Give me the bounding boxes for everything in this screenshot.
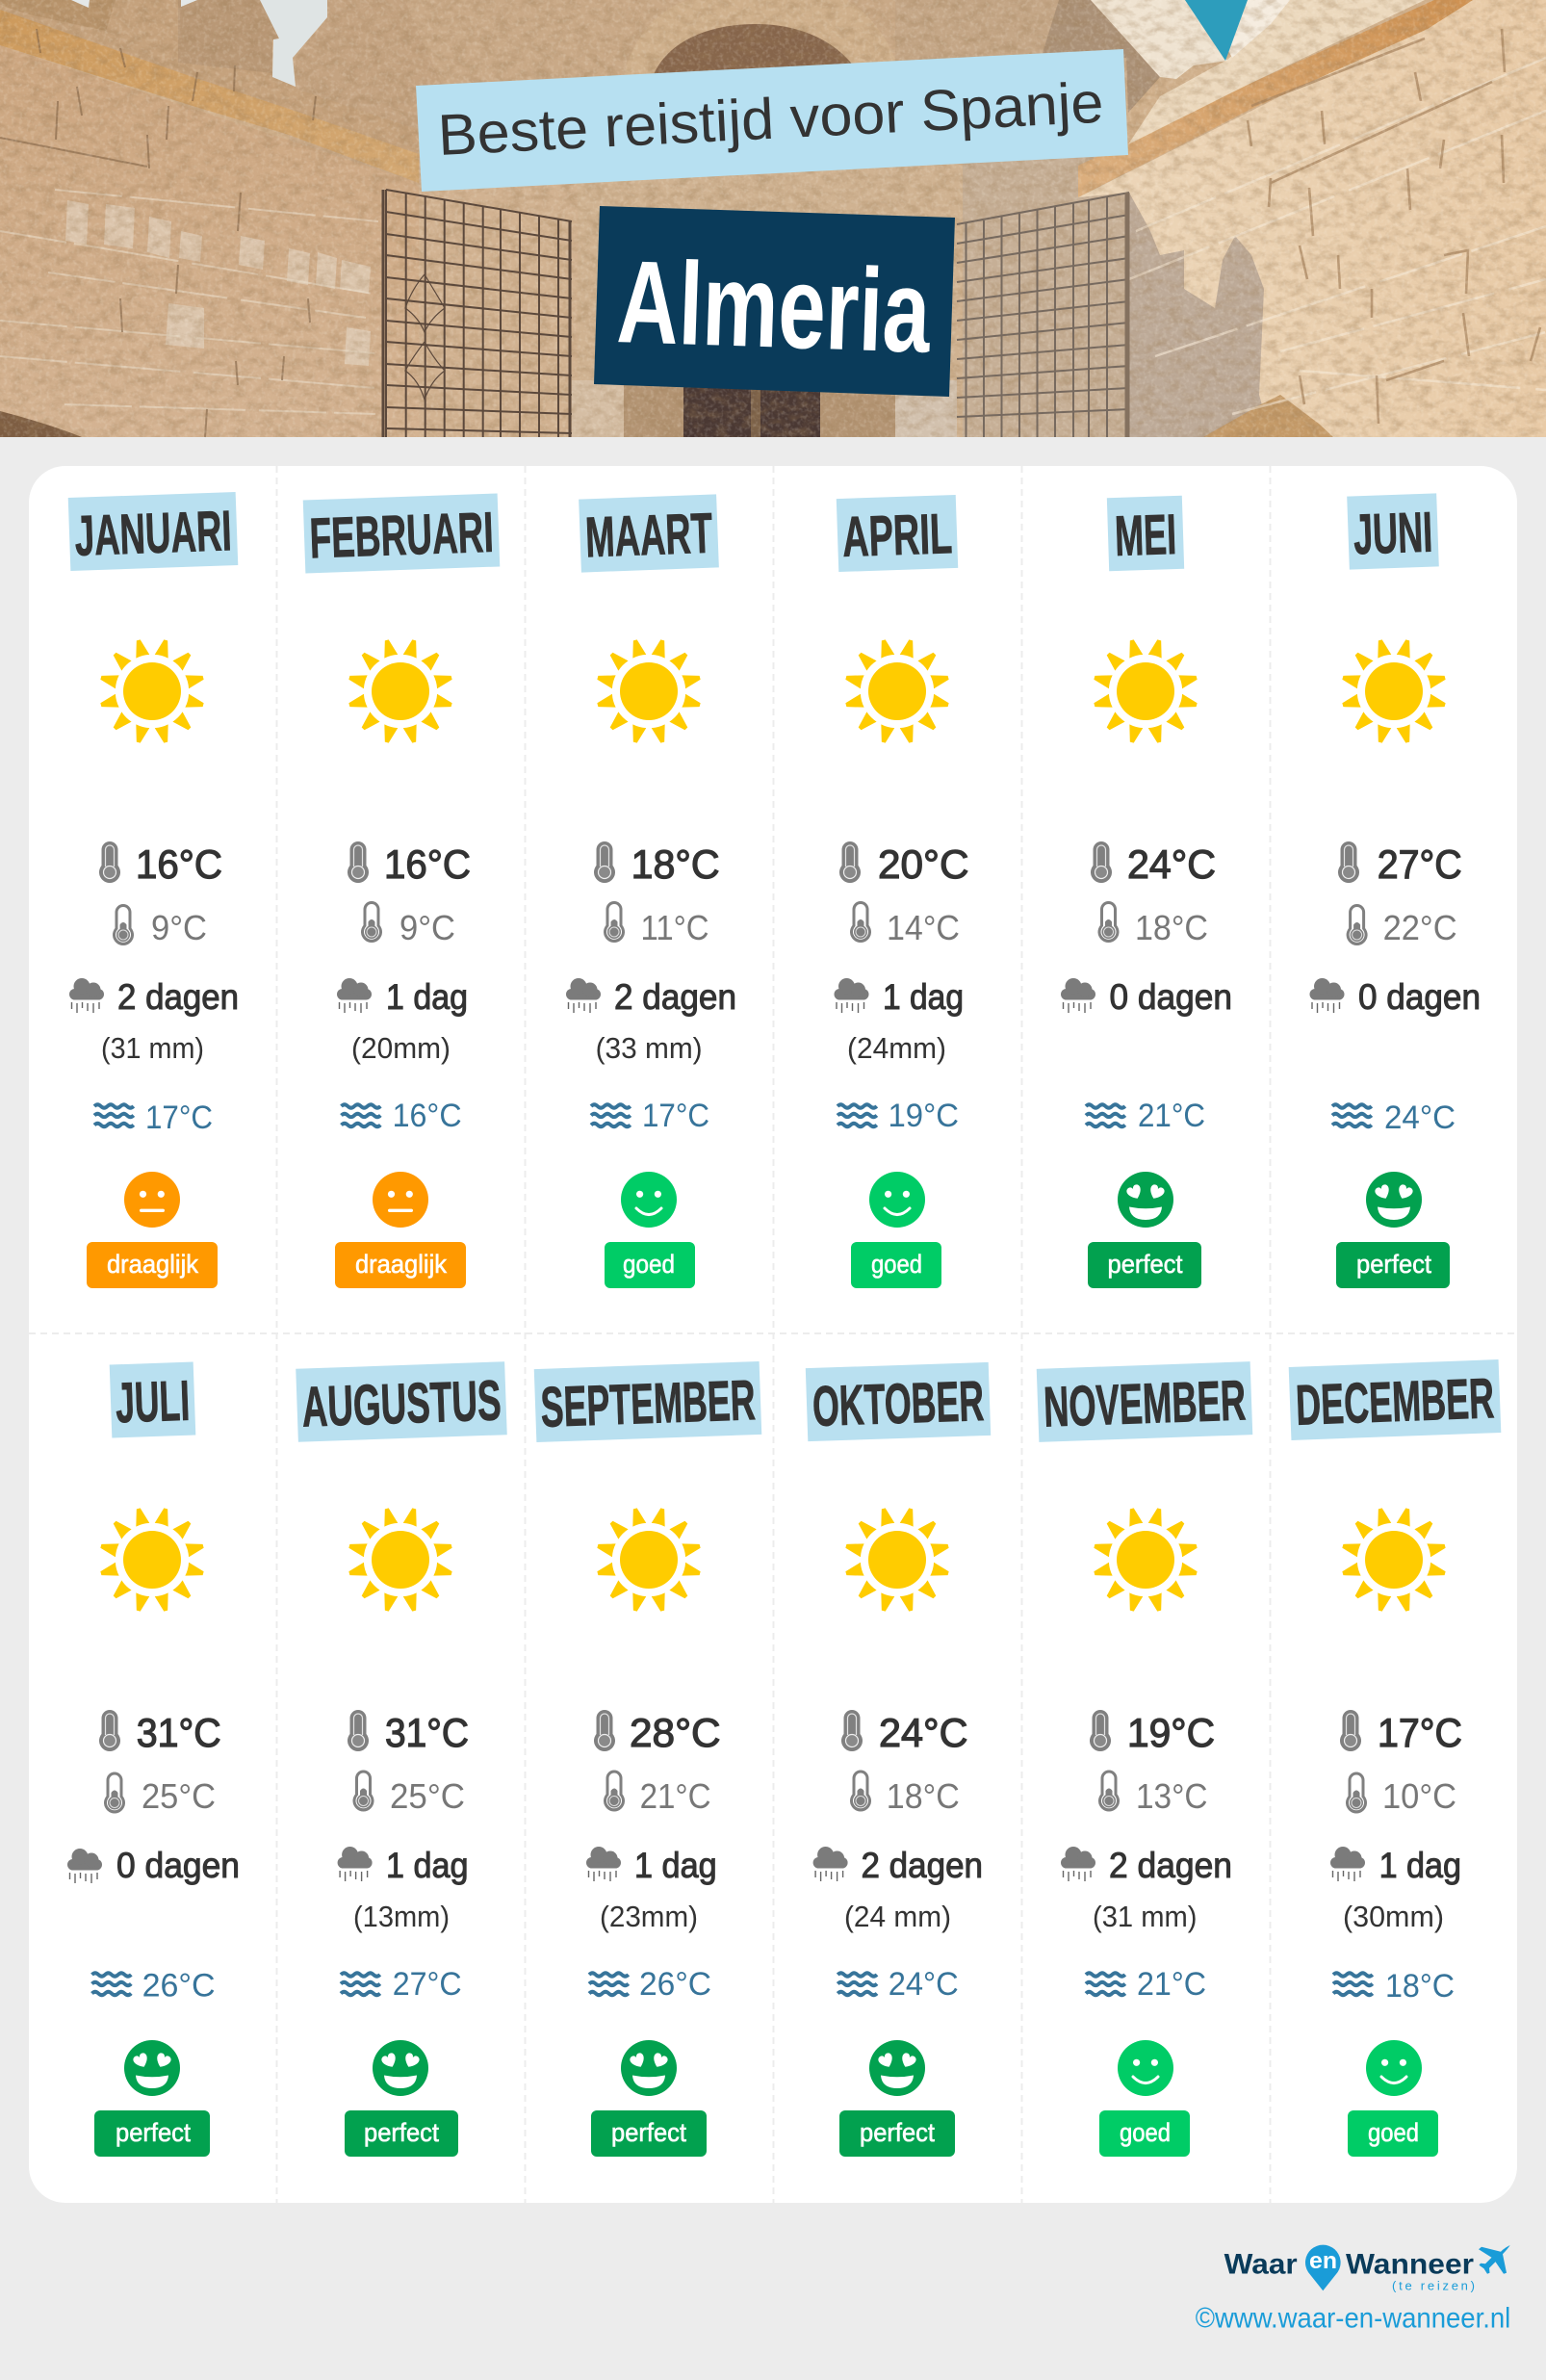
heading: september <box>534 1361 761 1442</box>
min temperature: 9°C <box>151 908 207 947</box>
icon: waves <box>341 1973 380 1995</box>
rating badge: draaglijk <box>355 1250 447 1279</box>
rating badge <box>605 1242 695 1288</box>
icon: heart eyes face <box>869 2040 925 2096</box>
heading: september: SEPTEMBER <box>539 1368 757 1439</box>
logo: Waar en Wanneer: Wanneer <box>1346 2249 1474 2281</box>
rating badge <box>87 1242 218 1288</box>
rating badge: goed <box>1120 2118 1171 2147</box>
icon: rain cloud <box>338 1847 373 1881</box>
icon: waves <box>94 1104 134 1126</box>
rainfall: (24 mm) <box>844 1900 951 1933</box>
rating badge: perfect <box>1107 1250 1183 1279</box>
rating badge: perfect <box>611 2118 686 2147</box>
rain days: 1 dag <box>1379 1846 1461 1885</box>
min temperature: 10°C <box>1382 1776 1456 1816</box>
min temperature: 11°C <box>641 908 709 947</box>
heading: januari: JANUARI <box>73 499 233 568</box>
website url: ©www.waar-en-wanneer.nl <box>1196 2303 1510 2335</box>
rating badge: perfect <box>364 2118 439 2147</box>
min temperature: 13°C <box>1136 1776 1207 1816</box>
sea temperature: 19°C <box>888 1098 959 1134</box>
icon: thermometer low <box>1346 1772 1367 1813</box>
icon: thermometer low <box>361 901 382 943</box>
max temperature: 18°C <box>631 841 720 887</box>
max temperature: 16°C <box>136 841 222 887</box>
icon: sun <box>844 638 950 744</box>
rating badge <box>851 1242 941 1288</box>
heading: mei <box>1107 496 1184 571</box>
icon: thermometer low <box>1098 1770 1120 1811</box>
month: september <box>534 1361 761 2157</box>
rainfall: (31 mm) <box>1093 1900 1198 1933</box>
rating badge <box>94 2110 210 2157</box>
max temperature: 31°C <box>137 1710 221 1755</box>
panel: month card <box>29 466 1517 2203</box>
min temperature: 22°C <box>1383 908 1457 947</box>
month: november <box>1037 1361 1252 2157</box>
icon: heart eyes face <box>124 2040 180 2096</box>
rain days: 1 dag <box>883 977 964 1017</box>
max temperature: 28°C <box>630 1710 721 1755</box>
icon: smiling face <box>1118 2040 1173 2096</box>
rain days: 0 dagen <box>1109 977 1232 1017</box>
icon: thermometer low <box>850 901 871 943</box>
icon: waves <box>1086 1104 1125 1126</box>
min temperature: 25°C <box>142 1776 216 1816</box>
rainfall: (24mm) <box>847 1031 946 1065</box>
icon: sun <box>1093 1507 1198 1613</box>
icon: neutral face <box>373 1172 428 1228</box>
max temperature: 17°C <box>1378 1710 1462 1755</box>
icon: rain cloud <box>1309 978 1344 1013</box>
icon: thermometer high <box>594 841 615 883</box>
max temperature: 24°C <box>879 1710 968 1755</box>
min temperature: 21°C <box>640 1776 711 1816</box>
icon: waves <box>92 1973 131 1995</box>
rainfall: (33 mm) <box>596 1031 703 1065</box>
heading: augustus <box>296 1361 507 1442</box>
heading: april <box>837 495 958 572</box>
month: maart <box>566 494 736 1288</box>
month: januari <box>68 492 239 1288</box>
rain days: 2 dagen <box>1109 1846 1232 1885</box>
icon: sun <box>596 638 702 744</box>
heading: oktober <box>806 1362 991 1441</box>
min temperature: 9°C <box>399 908 455 947</box>
rating badge: perfect <box>1356 1250 1431 1279</box>
rain days: 2 dagen <box>117 977 239 1017</box>
heading: november <box>1037 1361 1252 1442</box>
icon: rain cloud <box>1061 1847 1095 1881</box>
rain days: 1 dag <box>386 977 468 1017</box>
rating badge <box>1336 1242 1450 1288</box>
heading: januari <box>68 492 238 571</box>
heading: maart: MAART <box>584 502 713 569</box>
icon: smiling face <box>1366 2040 1422 2096</box>
max temperature: 20°C <box>878 841 968 887</box>
rainfall: (31 mm) <box>101 1031 204 1065</box>
icon: thermometer high <box>594 1710 615 1751</box>
rain days: 2 dagen <box>861 1846 983 1885</box>
rainfall: (30mm) <box>1343 1900 1444 1933</box>
rating badge <box>335 1242 466 1288</box>
month: februari <box>303 493 500 1288</box>
sea temperature: 17°C <box>642 1098 709 1134</box>
month: augustus <box>296 1361 507 2157</box>
rating badge <box>839 2110 955 2157</box>
rainfall: (23mm) <box>600 1900 698 1933</box>
sea temperature: 17°C <box>145 1099 213 1136</box>
icon: thermometer high <box>99 1710 120 1751</box>
rainfall: (13mm) <box>353 1900 450 1933</box>
min temperature: 25°C <box>390 1776 465 1816</box>
month: april <box>834 495 968 1288</box>
icon: waves <box>837 1104 877 1126</box>
sea temperature: 24°C <box>889 1966 959 2003</box>
icon: waves <box>341 1104 380 1126</box>
icon: sun <box>99 638 205 744</box>
month: mei <box>1061 496 1232 1288</box>
min temperature: 18°C <box>887 1776 960 1816</box>
icon: heart eyes face <box>1366 1172 1422 1228</box>
logo: Waar en Wanneer: (te reizen) <box>1392 2279 1475 2293</box>
icon: thermometer low <box>113 904 134 945</box>
min temperature: 18°C <box>1135 908 1208 947</box>
icon: rain cloud <box>566 978 601 1013</box>
icon: waves <box>591 1104 631 1126</box>
icon: waves <box>837 1973 877 1995</box>
icon: thermometer high <box>841 1710 863 1751</box>
rating badge: perfect <box>860 2118 935 2147</box>
icon: rain cloud <box>1061 978 1095 1013</box>
heading: augustus: AUGUSTUS <box>300 1368 502 1439</box>
icon: thermometer high <box>1090 1710 1111 1751</box>
icon: heart eyes face <box>621 2040 677 2096</box>
icon: rain cloud <box>67 1849 102 1883</box>
icon: heart eyes face <box>373 2040 428 2096</box>
max temperature: 19°C <box>1127 1710 1215 1755</box>
icon: airplane <box>1479 2245 1510 2274</box>
sea temperature: 21°C <box>1137 1966 1206 2003</box>
icon: sun <box>1093 638 1198 744</box>
icon: thermometer low <box>604 1770 625 1811</box>
month: juli <box>67 1362 240 2157</box>
rating badge: draaglijk <box>107 1250 198 1279</box>
icon: rain cloud <box>586 1847 621 1881</box>
rating badge <box>345 2110 458 2157</box>
rating badge <box>1099 2110 1190 2157</box>
min temperature: 14°C <box>887 908 960 947</box>
rating badge: goed <box>1368 2118 1419 2147</box>
rain days: 1 dag <box>634 1846 717 1885</box>
heading: juli: JULI <box>115 1369 191 1435</box>
rating badge <box>1088 1242 1201 1288</box>
icon: rain cloud <box>1330 1847 1365 1881</box>
sea temperature: 21°C <box>1138 1098 1205 1134</box>
icon: thermometer low <box>352 1770 374 1811</box>
icon: sun <box>99 1507 205 1613</box>
icon: thermometer high <box>99 841 120 883</box>
icon: thermometer high <box>839 841 861 883</box>
logo: Waar en Wanneer <box>1224 2245 1510 2293</box>
heading: november: NOVEMBER <box>1043 1368 1247 1439</box>
title banner: Beste reistijd voor Spanje <box>416 49 1128 192</box>
rain days: 2 dagen <box>614 977 736 1017</box>
icon: sun <box>1341 1507 1447 1613</box>
rain days: 0 dagen <box>1358 977 1481 1017</box>
heading: april: APRIL <box>841 502 953 569</box>
sea temperature: 27°C <box>393 1966 462 2003</box>
icon: sun <box>348 1507 453 1613</box>
heading: maart <box>579 494 719 573</box>
title banner: Beste reistijd voor Spanje: Beste reistijd voor Spanje <box>436 70 1105 168</box>
rating badge: goed <box>623 1250 675 1279</box>
max temperature: 27°C <box>1378 841 1462 887</box>
icon: heart eyes face <box>1118 1172 1173 1228</box>
rain days: 0 dagen <box>116 1846 240 1885</box>
logo: Waar en Wanneer: Waar <box>1224 2249 1298 2281</box>
heading: juli <box>110 1362 195 1437</box>
max temperature: 16°C <box>384 841 471 887</box>
icon: waves <box>589 1973 629 1995</box>
icon: thermometer low <box>1347 904 1368 945</box>
rain days: 1 dag <box>386 1846 468 1885</box>
sea temperature: 18°C <box>1385 1968 1455 2005</box>
heading: juni: JUNI <box>1353 501 1433 566</box>
icon: rain cloud <box>337 978 372 1013</box>
icon: thermometer high <box>348 841 369 883</box>
icon: sun <box>844 1507 950 1613</box>
heading: juni <box>1347 493 1439 570</box>
sea temperature: 26°C <box>142 1968 216 2005</box>
icon: sun <box>348 638 453 744</box>
city banner: Almeria: Almeria <box>615 236 933 377</box>
rating badge: perfect <box>116 2118 191 2147</box>
header photo: castle gate with stone walls <box>0 0 1546 437</box>
icon: thermometer high <box>348 1710 369 1751</box>
rating badge <box>591 2110 707 2157</box>
icon: thermometer high <box>1340 1710 1361 1751</box>
month: december <box>1289 1359 1501 2157</box>
icon: rain cloud <box>834 978 868 1013</box>
max temperature: 24°C <box>1127 841 1216 887</box>
icon: neutral face <box>124 1172 180 1228</box>
icon: thermometer low <box>1097 901 1119 943</box>
icon: map pin <box>1305 2245 1341 2290</box>
logo: Waar en Wanneer: en <box>1309 2248 1337 2274</box>
icon: rain cloud <box>69 978 104 1013</box>
sea temperature: 26°C <box>639 1966 711 2003</box>
sea temperature: 16°C <box>393 1098 462 1134</box>
heading: oktober: OKTOBER <box>812 1369 985 1438</box>
max temperature: 31°C <box>385 1710 469 1755</box>
rainfall: (20mm) <box>351 1031 451 1065</box>
heading: februari: FEBRUARI <box>308 501 495 570</box>
icon: waves <box>1333 1973 1373 1995</box>
city banner: Almeria <box>594 206 955 397</box>
month: oktober <box>806 1362 991 2157</box>
icon: thermometer low <box>104 1772 125 1813</box>
icon: sun <box>1341 638 1447 744</box>
icon: smiling face <box>869 1172 925 1228</box>
heading: februari <box>303 493 500 574</box>
icon: thermometer low <box>850 1770 871 1811</box>
heading: mei: MEI <box>1114 503 1177 568</box>
sea temperature: 24°C <box>1384 1099 1456 1136</box>
icon: sun <box>596 1507 702 1613</box>
icon: thermometer high <box>1338 841 1359 883</box>
icon: waves <box>1086 1973 1125 1995</box>
month: juni <box>1309 493 1481 1288</box>
rating badge <box>1348 2110 1438 2157</box>
icon: thermometer low <box>604 901 625 943</box>
rating badge: goed <box>871 1250 922 1279</box>
icon: smiling face <box>621 1172 677 1228</box>
icon: rain cloud <box>813 1847 848 1881</box>
icon: waves <box>1332 1104 1372 1126</box>
icon: thermometer high <box>1091 841 1112 883</box>
